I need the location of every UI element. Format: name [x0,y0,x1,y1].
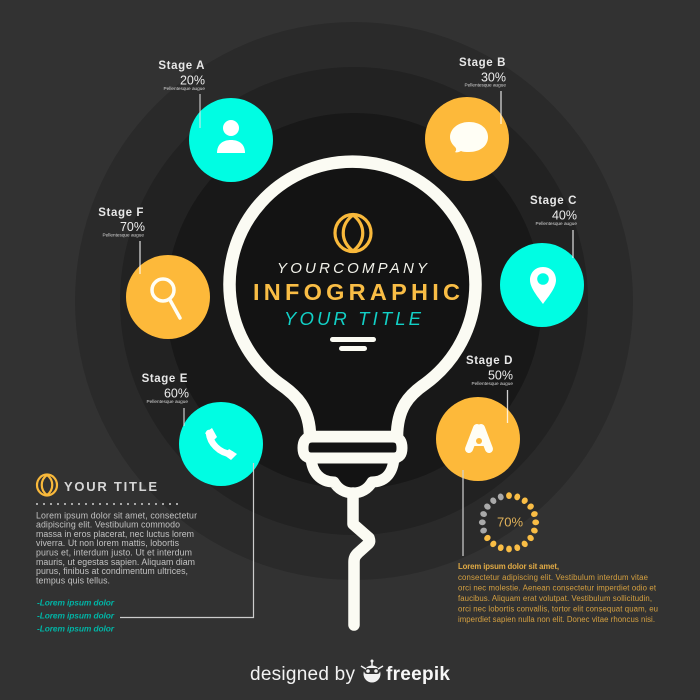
stage C [500,195,584,327]
stage A: Stage A [158,60,205,72]
left panel body text: Lorem ipsum dolor sit amet, consectetur [36,510,197,520]
right text block: orci nec lobortis convallis, tortor elit consequat quam, eu [458,604,658,614]
footer credit [250,660,450,685]
stage E: 60% [164,386,189,400]
right text block: orci nec molestie. Aenean consectetur imperdiet odio et [458,584,657,592]
left panel heading: YOUR TITLE [64,479,157,494]
connector: stage D to ring [462,470,464,556]
progress ring 70% [479,492,539,552]
right text block: faucibus. Aliquam erat volutpat. Vestibulum sollicitudin, [458,594,652,603]
stage E: Stage E [142,373,188,385]
center logo [335,214,371,252]
center title: YOURCOMPANY [277,260,428,277]
left panel teal list [37,598,115,634]
right text block: consectetur adipiscing elit. Vestibulum interdum vitae [458,573,648,582]
stage D [436,355,520,481]
stage F [98,207,210,339]
stage D: Pellentesque augue [472,381,513,386]
stage E [142,373,263,486]
left panel body text: massa in eros placerat, nec luctus lorem [36,529,194,539]
stage A: Pellentesque augue [164,86,205,91]
left panel body text: mauris, ut egestas sapien. Aliquam diam [36,557,195,567]
stage A: 20% [180,74,205,88]
stage F: Stage F [98,207,144,219]
right text block: Lorem ipsum dolor sit amet, [458,562,559,571]
left panel body text: viverra. Ut non lorem mattis, lobortis [36,538,180,548]
center title [253,260,460,329]
left panel body text: tempus quis tellus. [36,576,110,586]
left panel body text [36,510,197,586]
progress ring 70%: 70% [497,514,523,530]
footer credit: designed by [250,664,356,685]
right text block: imperdiet sapien nulla non elit. Donec vitae rhoncus nisi. [458,615,655,624]
icon: freepik mascot [361,660,383,682]
left panel body text: purus, finibus at condimentum ultrices, [36,566,188,576]
left panel teal list: -Lorem ipsum dolor [37,610,115,620]
stage C: Stage C [530,195,577,207]
stage C: Pellentesque augue [536,221,577,226]
bulb filament lines [330,337,376,351]
center title: INFOGRAPHIC [253,279,460,305]
left panel body text: adipiscing elit. Vestibulum commodo [36,520,180,530]
left panel body text: purus et, interdum justo. Ut et interdum [36,548,192,558]
background concentric rings [75,22,633,580]
right text block [458,562,658,624]
stage B [425,57,509,181]
stage E: Pellentesque augue [147,399,188,404]
center title: YOUR TITLE [284,308,422,329]
stage B: Stage B [459,57,506,69]
stage B: Pellentesque augue [465,82,506,88]
stage C: 40% [552,208,577,222]
footer credit: freepik [386,664,450,685]
stage F: 70% [120,220,145,234]
left panel teal list: -Lorem ipsum dolor [37,598,115,608]
stage D: Stage D [466,355,513,367]
light bulb outline [229,162,476,625]
left panel logo [37,474,57,496]
stage D: 50% [488,368,513,382]
left panel [36,474,197,634]
left panel teal list: -Lorem ipsum dolor [37,624,115,634]
stage F: Pellentesque augue [103,232,144,238]
stage B: 30% [481,70,506,84]
connector: stage E to left list [120,463,254,618]
stage A [158,60,273,182]
